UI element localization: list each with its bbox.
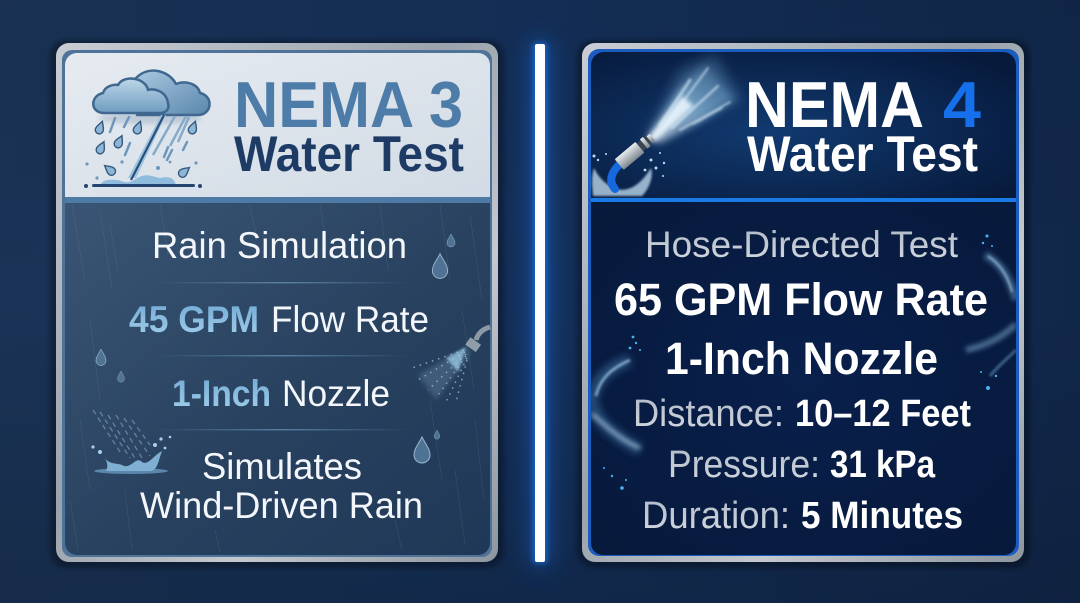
decoration: right water splash	[966, 234, 1016, 390]
text: Duration: Duration:	[642, 495, 790, 537]
text: 45 GPM Flow Rate: Flow Rate	[271, 299, 429, 340]
subtitle: Water Test: Water Test	[234, 126, 464, 182]
icon: rain cloud with splash	[84, 71, 210, 188]
text: Distance: 10–12 Feet	[795, 393, 971, 435]
text: 45 GPM Flow Rate: 45 GPM	[129, 299, 259, 340]
text: Rain Simulation: Rain Simulation	[152, 225, 407, 266]
text: Distance	[633, 393, 971, 435]
text: Simulates Wind-Driven Rain: Simulates	[202, 446, 362, 487]
title: NEMA 4: NEMA	[745, 68, 924, 141]
body: NEMA 4	[591, 202, 1016, 555]
text: 65 GPM Flow Rate: 65 GPM Flow Rate	[614, 274, 988, 325]
text: Simulates Wind-Driven Rain	[140, 446, 423, 526]
center divider: glowing line	[531, 40, 549, 565]
title: NEMA 4: 4	[943, 68, 981, 141]
panel frame: NEMA 3	[50, 40, 504, 568]
subtitle: Water Test: Water Test	[747, 126, 978, 182]
icon: hose with water jet	[592, 55, 742, 196]
text: Pressure: 31 kPa	[830, 444, 936, 486]
text: Simulates Wind-Driven Rain: Wind-Driven Rain	[140, 485, 423, 526]
panel frame: NEMA 4	[577, 40, 1030, 568]
text: Distance: Distance:	[633, 393, 784, 435]
text: 1-Inch Nozzle: Nozzle	[282, 373, 390, 414]
header: NEMA 4	[591, 52, 1016, 202]
icon: water drops	[96, 234, 455, 463]
text: Hose-Directed Test: Hose-Directed Test	[645, 224, 959, 265]
text: Duration	[642, 495, 963, 537]
header: NEMA 3	[65, 53, 490, 203]
text: 1-Inch Nozzle: 1-Inch	[172, 373, 271, 414]
panel: NEMA 3	[50, 40, 504, 568]
text: Pressure	[668, 444, 936, 486]
text: 45 GPM Flow Rate	[129, 299, 429, 340]
body: NEMA 3	[65, 203, 490, 555]
icon: shower nozzle	[412, 327, 490, 402]
icon: rain splash	[91, 410, 171, 474]
text: 1-Inch Nozzle: 1-Inch Nozzle	[665, 333, 938, 384]
text: Duration: 5 Minutes	[801, 495, 963, 537]
text: Pressure: Pressure:	[668, 444, 820, 486]
title: NEMA 3: NEMA 3	[234, 68, 463, 141]
decoration: left water splash	[592, 336, 641, 490]
panel: NEMA 4	[577, 40, 1030, 568]
text: 1-Inch Nozzle	[172, 373, 390, 414]
